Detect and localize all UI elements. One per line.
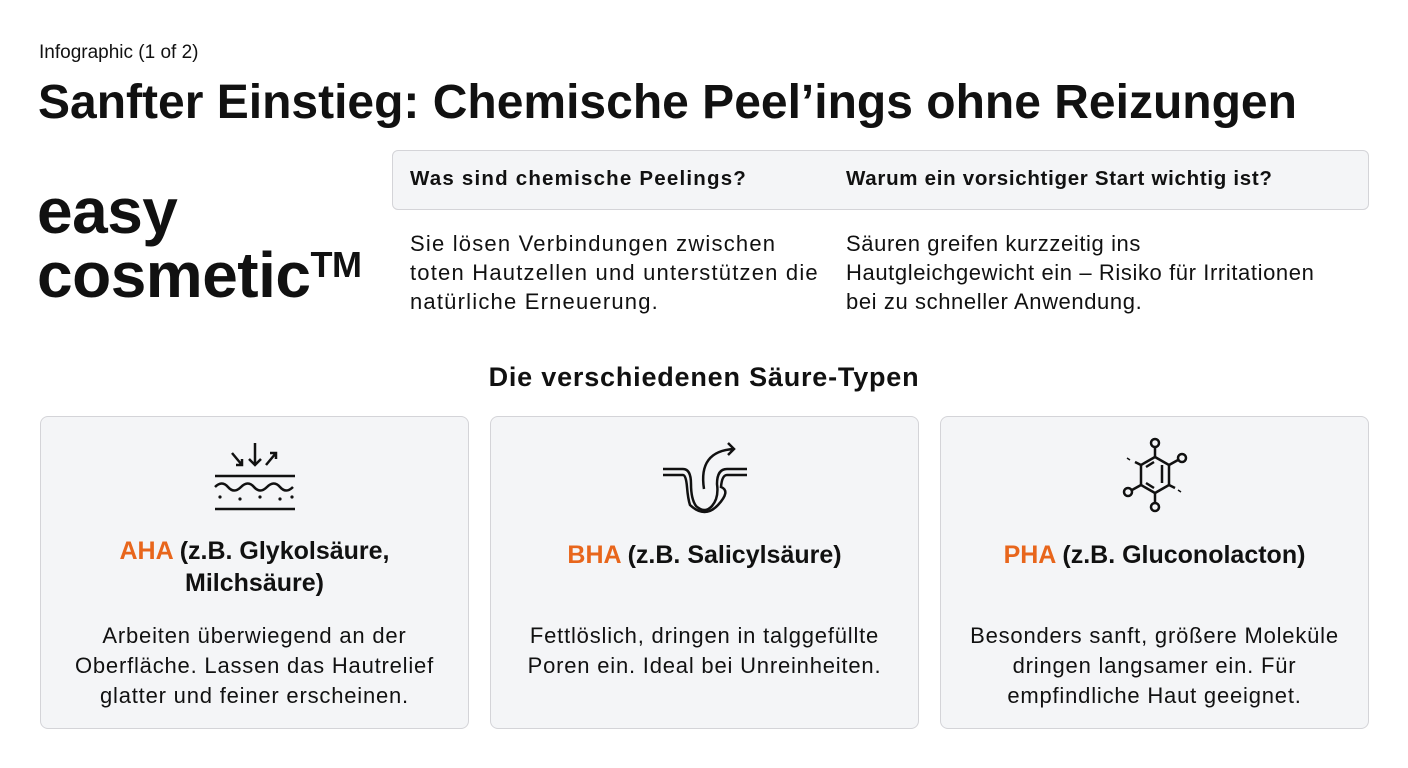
header box: [392, 150, 1369, 210]
text: what: toten Hautzellen und unterstützen die: [410, 260, 819, 285]
card title: BHA (z.B. Salicylsäure): [567, 541, 842, 569]
card text: [970, 623, 1339, 708]
card text: [528, 623, 881, 678]
card text: [75, 623, 434, 708]
text: why: [846, 231, 1314, 314]
icon: pore: [663, 442, 747, 514]
logo: [37, 175, 361, 311]
text: why: Hautgleichgewicht ein – Risiko für Irritationen: [846, 260, 1314, 285]
card text: Poren ein. Ideal bei Unreinheiten.: [528, 653, 881, 678]
card: PHA: [940, 416, 1369, 729]
card: AHA: [40, 416, 469, 729]
text: what: [410, 231, 819, 314]
card title: Milchsäure): [185, 569, 324, 597]
card text: Fettlöslich, dringen in talggefüllte: [530, 623, 879, 648]
icon: skin layers: [214, 443, 295, 510]
card text: Arbeiten überwiegend an der: [102, 623, 407, 648]
card title: PHA (z.B. Gluconolacton): [1004, 541, 1305, 569]
section heading: Die verschiedenen Säure-Typen: [489, 362, 919, 392]
heading: why: Warum ein vorsichtiger Start wichtig ist?: [846, 167, 1273, 190]
card text: Besonders sanft, größere Moleküle: [970, 623, 1339, 648]
text: what: natürliche Erneuerung.: [410, 289, 659, 314]
heading: what: Was sind chemische Peelings?: [410, 167, 747, 190]
text: why: Säuren greifen kurzzeitig ins: [846, 231, 1141, 256]
card text: Oberfläche. Lassen das Hautrelief: [75, 653, 434, 678]
card text: dringen langsamer ein. Für: [1013, 653, 1296, 678]
logo: easy: [37, 175, 177, 247]
subtitle: Infographic (1 of 2): [39, 42, 198, 63]
logo: cosmeticTM: [37, 239, 361, 311]
card text: empfindliche Haut geeignet.: [1007, 683, 1302, 708]
card title: [120, 537, 390, 597]
card title: AHA (z.B. Glykolsäure,: [120, 537, 390, 565]
card: BHA: [490, 416, 919, 729]
card text: glatter und feiner erscheinen.: [100, 683, 409, 708]
icon: molecule: [1122, 438, 1188, 512]
text: why: bei zu schneller Anwendung.: [846, 289, 1142, 314]
text: what: Sie lösen Verbindungen zwischen: [410, 231, 776, 256]
title: Sanfter Einstieg: Chemische Peel’ings ohne Reizungen: [38, 76, 1297, 129]
